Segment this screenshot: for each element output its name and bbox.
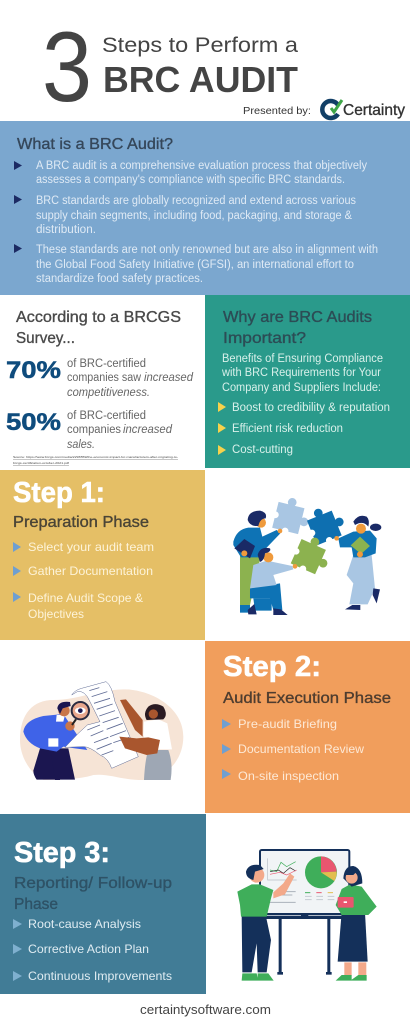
step 1 list: Objectives xyxy=(28,607,84,621)
step 3 list xyxy=(13,917,172,983)
panel: what is a BRC audit xyxy=(0,121,410,295)
source citation: brcgs-certification-october-2021.pdf xyxy=(13,461,69,465)
benefits list: Cost-cutting xyxy=(232,444,293,456)
benefits intro text: Company and Suppliers Include: xyxy=(222,382,381,394)
step 2 list: Pre-audit Briefing xyxy=(238,717,337,731)
panel: step 2 xyxy=(205,641,410,813)
background blob xyxy=(20,689,183,780)
stat: 70 percent: competitiveness. xyxy=(67,387,150,399)
step 1 list xyxy=(13,540,154,621)
presented by line with Certainty logo: Certainty xyxy=(343,102,405,119)
illustration: team assembling puzzle pieces xyxy=(233,495,381,615)
title: 3 xyxy=(42,11,92,122)
person: right holding folder xyxy=(334,516,381,610)
bullet text 1: assesses a company's compliance with specific BRC standards. xyxy=(36,174,345,186)
benefits list: Boost to credibility & reputation xyxy=(232,402,390,414)
woman holding document xyxy=(119,699,172,780)
step 1 list: Define Audit Scope & xyxy=(28,591,143,605)
stat: 50 percent: companies xyxy=(67,424,121,436)
man with magnifying glass xyxy=(23,702,89,780)
benefits intro text xyxy=(221,353,383,394)
title xyxy=(42,11,298,122)
panel: BRCGS survey xyxy=(0,295,205,470)
stat: 50 percent xyxy=(6,409,173,451)
step 1 list: Select your audit team xyxy=(28,540,154,554)
bullet text 3: These standards are not only renowned but are also in alignment with xyxy=(36,244,378,256)
panel: step 3 xyxy=(0,814,206,994)
paper scroll xyxy=(65,682,138,768)
line chart xyxy=(268,858,297,880)
heading: according to a BRCGS survey xyxy=(16,309,181,347)
benefits intro text: with BRC Requirements for Your xyxy=(221,367,381,379)
step 1 list: Gather Documentation xyxy=(28,564,153,578)
bullet text 2: supply chain segments, including food, packaging, and storage & xyxy=(36,210,352,222)
stat: 70 percent: 70% xyxy=(6,357,61,384)
step 2 list xyxy=(222,717,364,783)
stat: 50 percent: increased xyxy=(123,424,173,436)
step 2 list: Documentation Review xyxy=(238,742,364,756)
stat: 50 percent: of BRC-certified xyxy=(67,410,146,422)
bullet text 2: distribution. xyxy=(36,224,96,236)
presented by line with Certainty logo xyxy=(243,100,405,119)
heading: step 1: Step 1: xyxy=(13,477,105,509)
heading: why are BRC audits important: Why are BRC Audits xyxy=(223,309,372,326)
stat: 70 percent: companies saw xyxy=(67,372,142,384)
heading: according to a BRCGS survey: Survey... xyxy=(16,330,75,347)
person: man pointing at board xyxy=(237,865,294,981)
step 3 list: Root-cause Analysis xyxy=(28,917,141,931)
subheading: reporting follow-up phase xyxy=(14,875,172,913)
benefits list xyxy=(218,402,390,456)
benefits list: Efficient risk reduction xyxy=(232,423,343,435)
bullet text 1: A BRC audit is a comprehensive evaluation process that objectively xyxy=(36,160,367,172)
benefits intro text: Benefits of Ensuring Compliance xyxy=(222,353,383,365)
source citation xyxy=(13,455,178,465)
illustration: two people presenting a chart board xyxy=(237,850,377,981)
subheading: preparation phase: Preparation Phase xyxy=(13,514,149,531)
source citation: Source: https://www.brcgs.com/media/2296559/the-economic-impact-for-manufacturers-after-migrating-to- xyxy=(13,455,178,459)
title: Steps to Perform a xyxy=(102,34,298,57)
heading: why are BRC audits important: Important? xyxy=(223,330,306,347)
heading: what is a BRC audit: What is a BRC Audit? xyxy=(17,136,173,153)
step 3 list: Corrective Action Plan xyxy=(28,942,149,956)
subheading: reporting follow-up phase: Reporting/ Follow-up xyxy=(14,875,172,892)
person: woman holding tablet xyxy=(336,866,377,981)
step 2 list: On-site inspection xyxy=(238,769,339,783)
person: crouching xyxy=(248,548,297,615)
stat: 70 percent: of BRC-certified xyxy=(67,358,146,370)
bullet text 3 xyxy=(14,244,378,285)
pie chart xyxy=(305,856,337,888)
puzzle pieces xyxy=(272,495,348,577)
title: BRC AUDIT xyxy=(103,59,298,100)
stat: 70 percent xyxy=(6,357,194,399)
heading: according to a BRCGS survey: According to a BRCGS xyxy=(16,309,181,326)
bullet text 1 xyxy=(14,160,367,186)
subheading: audit execution phase: Audit Execution Phase xyxy=(223,690,391,707)
heading: step 3: Step 3: xyxy=(14,837,110,869)
bullet text 2 xyxy=(14,195,356,236)
panel: why are BRC audits important xyxy=(205,295,410,468)
stat: 50 percent: 50% xyxy=(6,409,61,436)
presented by line with Certainty logo: Presented by: xyxy=(243,105,311,117)
presentation board xyxy=(260,850,349,975)
bullet text 3: the Global Food Safety Initiative (GFSI), an international effort to xyxy=(36,259,354,271)
step 3 list: Continuous Improvements xyxy=(28,969,172,983)
panel: step 1 xyxy=(0,470,205,640)
footer website: certaintysoftware.com xyxy=(140,1002,271,1017)
stat: 50 percent: sales. xyxy=(67,439,95,451)
bullet text 3: standardize food safety practices. xyxy=(36,273,203,285)
person: standing left xyxy=(233,511,282,613)
chart legend lines xyxy=(268,892,334,902)
subheading: reporting follow-up phase: Phase xyxy=(14,896,58,913)
illustration: two auditors reviewing a document xyxy=(20,682,183,780)
heading: step 2: Step 2: xyxy=(223,651,321,683)
bullet text 2: BRC standards are globally recognized and extend across various xyxy=(36,195,356,207)
stat: 70 percent: increased xyxy=(144,372,194,384)
heading: why are BRC audits important xyxy=(223,309,372,347)
